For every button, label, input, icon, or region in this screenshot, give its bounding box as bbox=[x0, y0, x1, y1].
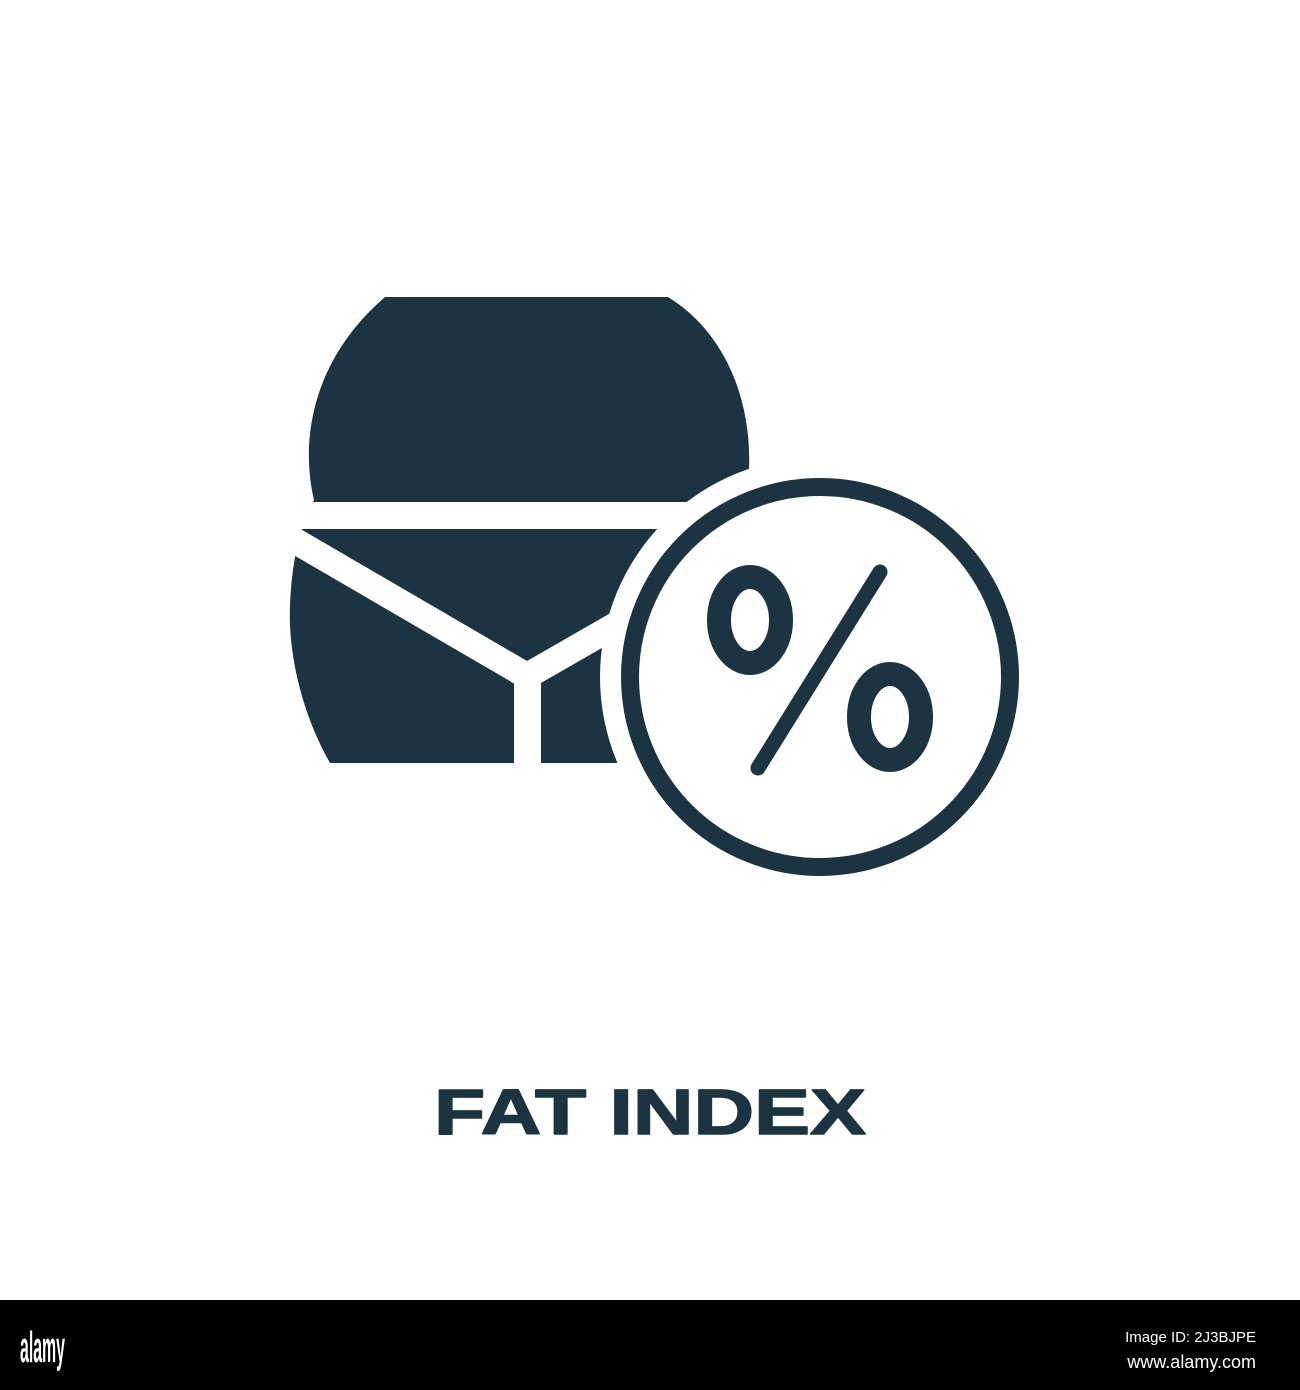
title: FAT INDEX bbox=[434, 1076, 866, 1148]
footer bar: alamy bbox=[20, 1323, 65, 1372]
footer url: www.alamy.com bbox=[1126, 1352, 1256, 1372]
icon: fat index body with percent bbox=[280, 297, 1040, 897]
icon: body silhouette bbox=[280, 297, 790, 776]
footer image id: Image ID: 2J3BJPE bbox=[1125, 1329, 1256, 1346]
footer bar bbox=[0, 1300, 1300, 1390]
icon: percent circle bbox=[600, 457, 1040, 897]
